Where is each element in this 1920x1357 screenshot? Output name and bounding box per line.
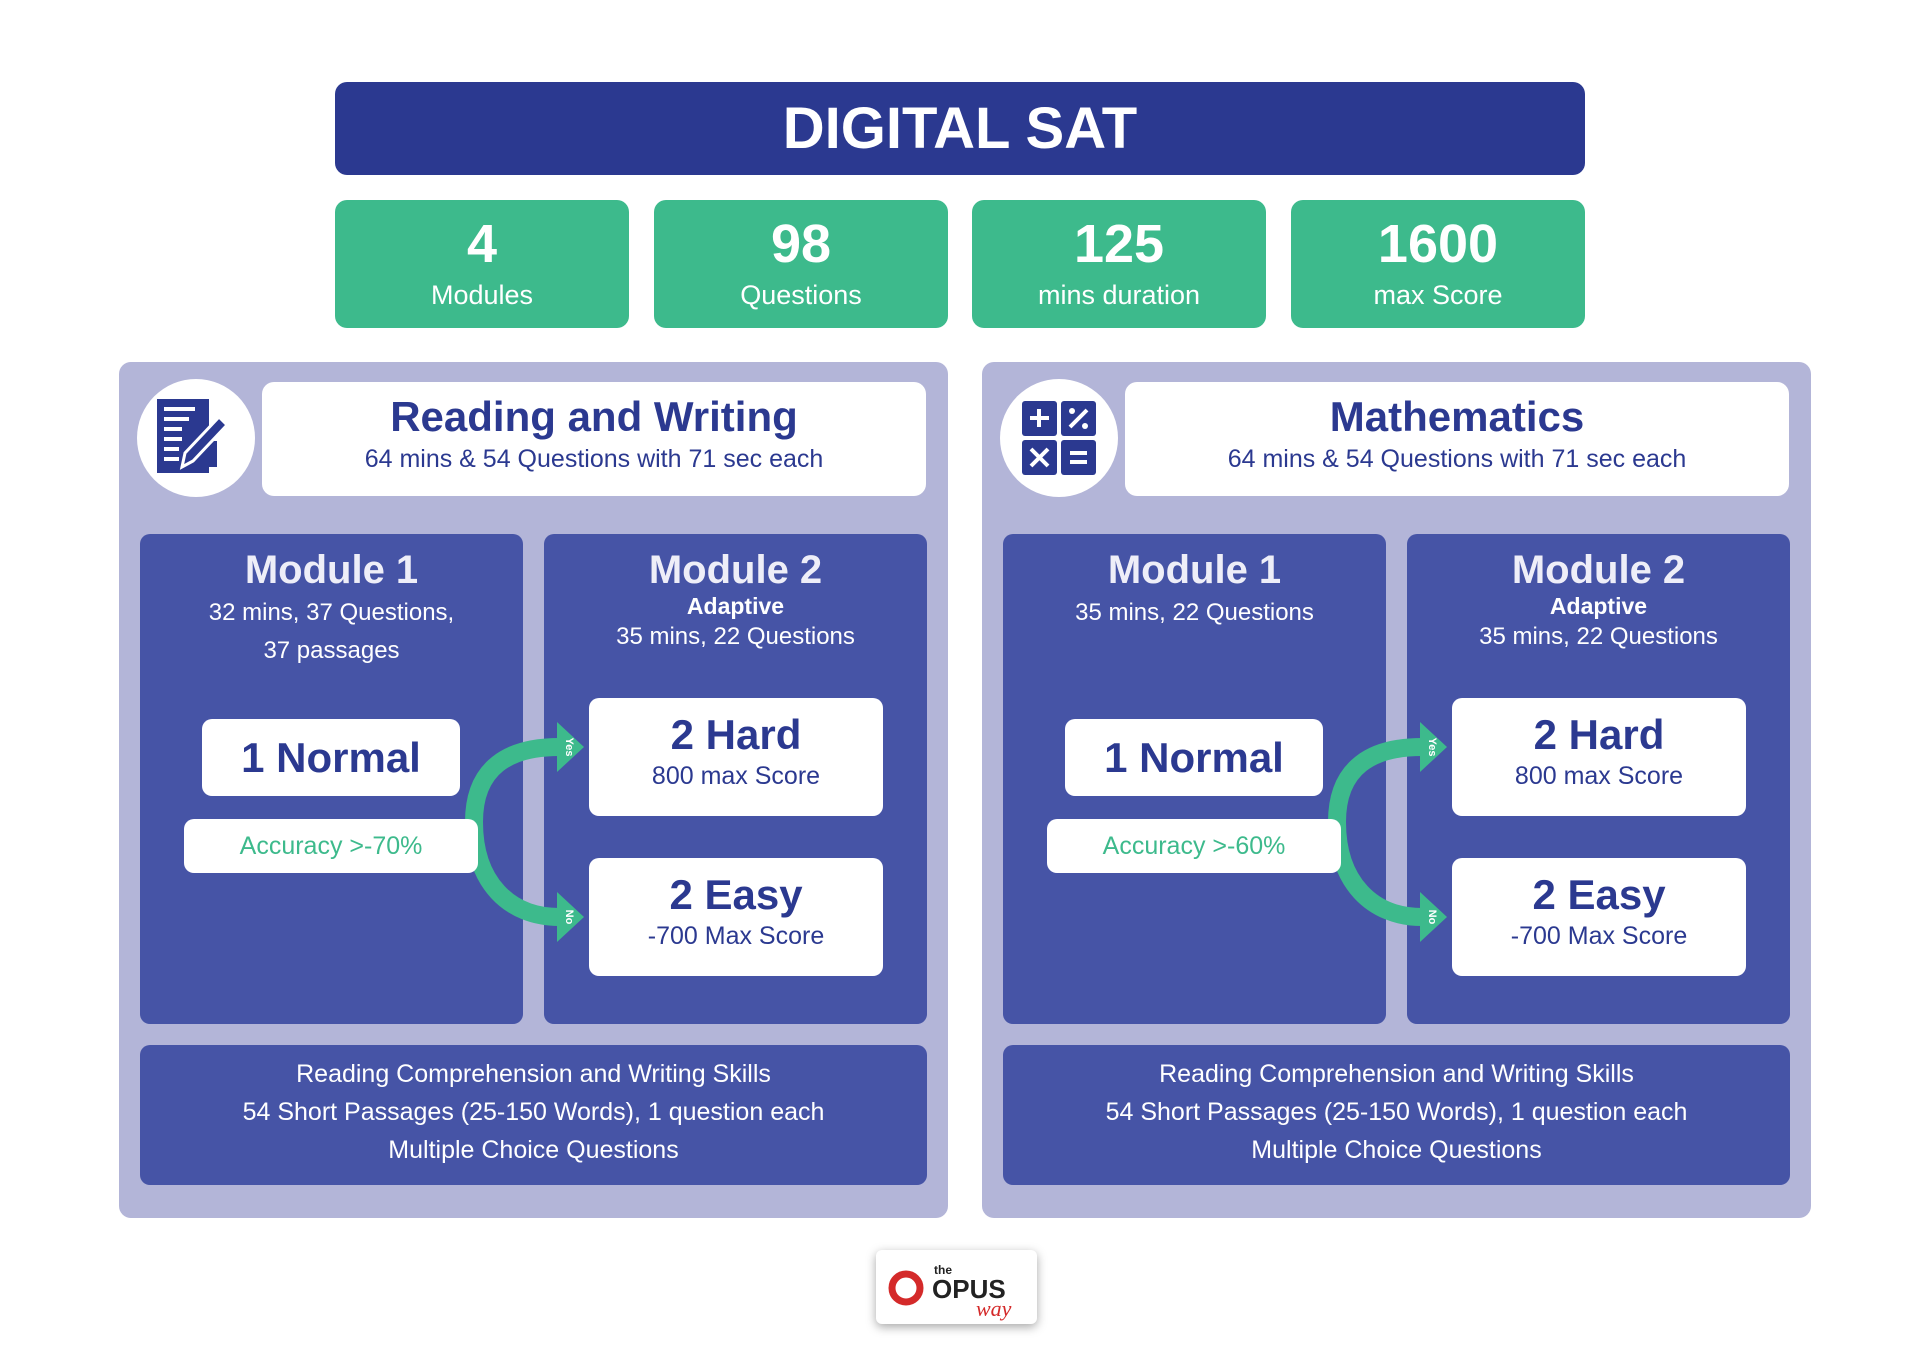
- 2 hard: [589, 698, 883, 816]
- logo: the: [934, 1263, 952, 1277]
- module 2: Module 2: [649, 548, 822, 592]
- arrows: No: [563, 910, 575, 925]
- accuracy: Accuracy >-70%: [240, 832, 422, 860]
- stat: questions: Questions: [740, 280, 862, 310]
- bottom text: [1003, 1045, 1790, 1185]
- 1 normal: 1 Normal: [241, 734, 421, 781]
- 2 easy: 2 Easy: [1532, 871, 1666, 918]
- 1 normal: 1 Normal: [1104, 734, 1284, 781]
- logo: OPUS: [932, 1274, 1006, 1304]
- 1 normal: [1065, 719, 1323, 796]
- stat: score: 1600: [1378, 214, 1498, 274]
- header: 64 mins & 54 Questions with 71 sec each: [365, 445, 823, 473]
- bottom text: 54 Short Passages (25-150 Words), 1 question each: [1106, 1098, 1687, 1126]
- icon: document and pen: [137, 379, 255, 497]
- module 2: Adaptive: [1550, 593, 1647, 619]
- accuracy: [184, 819, 478, 873]
- arrows: No: [1426, 910, 1438, 925]
- 1 normal: [202, 719, 460, 796]
- module 1: 35 mins, 22 Questions: [1075, 599, 1314, 626]
- stat: duration: mins duration: [1038, 280, 1200, 310]
- bottom text: Multiple Choice Questions: [1251, 1136, 1542, 1164]
- 2 easy: [589, 858, 883, 976]
- stat: duration: [972, 200, 1266, 328]
- module 2: 35 mins, 22 Questions: [616, 623, 855, 650]
- module 2: Adaptive: [687, 593, 784, 619]
- arrows: [1328, 722, 1447, 942]
- header: 64 mins & 54 Questions with 71 sec each: [1228, 445, 1686, 473]
- stat: modules: Modules: [431, 280, 533, 310]
- bottom text: 54 Short Passages (25-150 Words), 1 question each: [243, 1098, 824, 1126]
- 2 hard: 2 Hard: [1534, 711, 1664, 758]
- 2 easy: -700 Max Score: [1511, 922, 1687, 950]
- bottom text: [140, 1045, 927, 1185]
- header: Reading and Writing: [390, 393, 798, 440]
- bottom text: Reading Comprehension and Writing Skills: [296, 1060, 771, 1088]
- accuracy: Accuracy >-60%: [1103, 832, 1285, 860]
- 2 hard: 800 max Score: [1515, 762, 1683, 790]
- 2 easy: -700 Max Score: [648, 922, 824, 950]
- module 2: Module 2: [1512, 548, 1685, 592]
- 2 hard: [1452, 698, 1746, 816]
- header: [1125, 382, 1789, 496]
- header: [262, 382, 926, 496]
- accuracy: [1047, 819, 1341, 873]
- arrows: [465, 722, 584, 942]
- 2 hard: 2 Hard: [671, 711, 801, 758]
- arrows: Yes: [563, 738, 575, 756]
- module 1: Module 1: [1108, 548, 1281, 592]
- logo: way: [976, 1296, 1012, 1321]
- module 1: [1003, 534, 1386, 1024]
- bottom text: Reading Comprehension and Writing Skills: [1159, 1060, 1634, 1088]
- module 1: 32 mins, 37 Questions,: [209, 599, 454, 626]
- stat: modules: 4: [467, 214, 497, 274]
- 2 easy: 2 Easy: [669, 871, 803, 918]
- title: [335, 82, 1585, 175]
- header: Mathematics: [1330, 393, 1584, 440]
- panel: mathematics: [982, 362, 1811, 1218]
- title: DIGITAL SAT: [783, 96, 1137, 161]
- module 1: [140, 534, 523, 1024]
- stat: modules: [335, 200, 629, 328]
- arrows: Yes: [1426, 738, 1438, 756]
- module 2: [544, 534, 927, 1024]
- panel: reading and writing: [119, 362, 948, 1218]
- module 2: [1407, 534, 1790, 1024]
- stat: questions: 98: [771, 214, 831, 274]
- stat: duration: 125: [1074, 214, 1164, 274]
- 2 hard: 800 max Score: [652, 762, 820, 790]
- bottom text: Multiple Choice Questions: [388, 1136, 679, 1164]
- stat: score: [1291, 200, 1585, 328]
- module 1: 37 passages: [263, 637, 400, 664]
- logo: [876, 1250, 1037, 1324]
- module 2: 35 mins, 22 Questions: [1479, 623, 1718, 650]
- stat: score: max Score: [1373, 280, 1503, 310]
- module 1: Module 1: [245, 548, 418, 592]
- 2 easy: [1452, 858, 1746, 976]
- icon: calculator: [1000, 379, 1118, 497]
- stat: questions: [654, 200, 948, 328]
